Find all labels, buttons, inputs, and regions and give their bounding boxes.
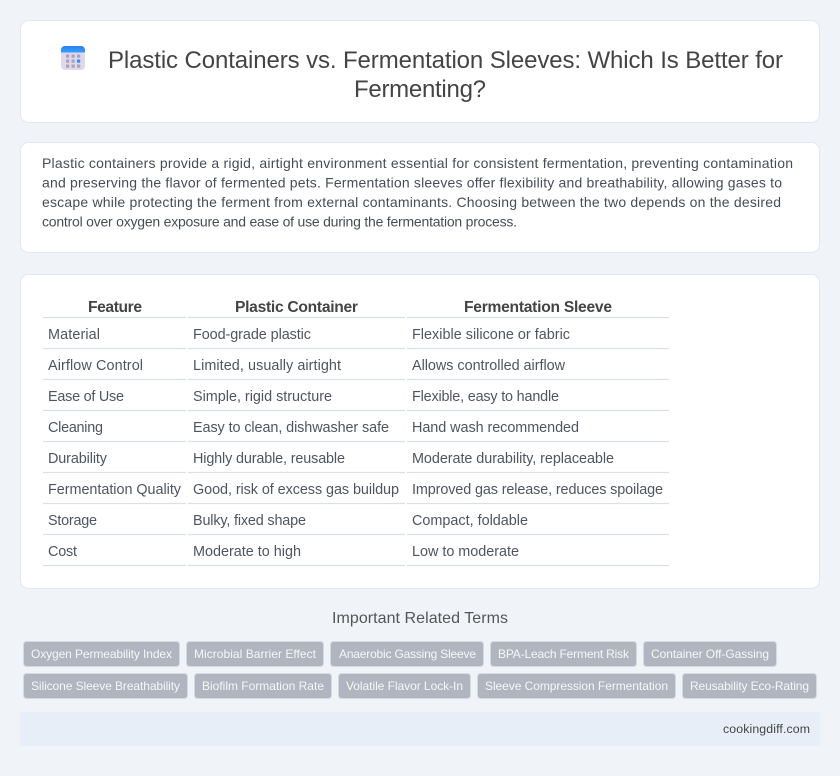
text block: introduction paragraph: and preserving the flavor of fermented pets. Fermentation sleeves offer flexibility and breathability, allowing gases to [42,174,782,190]
row: Material: Flexible silicone or fabric [412,327,570,343]
row: Cleaning: Cleaning [48,420,103,436]
table header: Feature [88,299,142,316]
table header: Fermentation Sleeve [464,299,612,316]
row: Material: Material [48,327,100,343]
footer [20,712,820,746]
row: Cleaning: Hand wash recommended [412,420,579,436]
heading: related terms: Important Related Terms [332,610,508,627]
row: Storage: Compact, foldable [412,513,528,529]
row: Fermentation Quality [48,482,663,498]
row: Storage [48,513,528,529]
row: Fermentation Quality: Fermentation Quality [48,482,182,498]
row: Airflow Control: Limited, usually airtight [193,358,341,374]
row: Fermentation Quality: Improved gas release, reduces spoilage [412,482,663,498]
row: Ease of Use: Ease of Use [48,389,124,405]
panel: introduction [20,142,820,252]
row: Material [48,327,570,343]
title: Plastic Containers vs. Fermentation Sleeves: Which Is Better for [108,47,783,74]
title: Fermenting? [354,76,486,103]
row: Storage: Storage [48,513,97,529]
tags: related terms: Sleeve Compression Fermentation [485,679,668,693]
row: Airflow Control: Airflow Control [48,358,143,374]
row: Storage: Bulky, fixed shape [193,513,306,529]
row: Durability: Durability [48,451,108,467]
row: Airflow Control [48,358,566,374]
tags: related terms: Microbial Barrier Effect [194,647,317,661]
footer source: cookingdiff.com [723,722,810,736]
row: Ease of Use [48,389,559,405]
row: Durability [48,451,614,467]
tags: related terms: Anaerobic Gassing Sleeve [339,647,476,661]
tags: related terms: Biofilm Formation Rate [202,679,324,693]
row: Durability: Moderate durability, replaceable [412,451,614,467]
text block: introduction paragraph: Plastic containers provide a rigid, airtight environment essential for consistent fermentation, preventing contamination [42,155,793,171]
row: Durability: Highly durable, reusable [193,451,345,467]
row: Cost: Cost [48,544,77,560]
tags: related terms: Volatile Flavor Lock-In [346,679,463,693]
row: Cost: Moderate to high [193,544,301,560]
icon: calendar [61,46,85,70]
tags: related terms: Silicone Sleeve Breathability [31,679,180,693]
panel: header [20,20,820,122]
row: Ease of Use: Simple, rigid structure [193,389,332,405]
row: Cost [48,544,519,560]
text block: introduction paragraph: control over oxygen exposure and ease of use during the fermentation process. [42,214,517,230]
row: Cleaning [48,420,579,436]
tags: related terms: Oxygen Permeability Index [31,647,172,661]
tags: related terms [24,642,816,698]
row: Cost: Low to moderate [412,544,519,560]
table header: Plastic Container [235,299,358,316]
panel: comparison table [20,274,820,588]
tags: related terms: Container Off-Gassing [651,647,769,661]
row: Fermentation Quality: Good, risk of excess gas buildup [193,482,399,498]
row: Material: Food-grade plastic [193,327,311,343]
row: Ease of Use: Flexible, easy to handle [412,389,559,405]
table header [88,299,612,316]
tags: related terms: BPA-Leach Ferment Risk [498,647,630,661]
row: Airflow Control: Allows controlled airflow [412,358,566,374]
row: Cleaning: Easy to clean, dishwasher safe [193,420,389,436]
text block: introduction paragraph: escape while protecting the ferment from external contaminants. Choosing between the two depends on the desired [42,194,781,210]
tags: related terms: Reusability Eco-Rating [690,679,809,693]
